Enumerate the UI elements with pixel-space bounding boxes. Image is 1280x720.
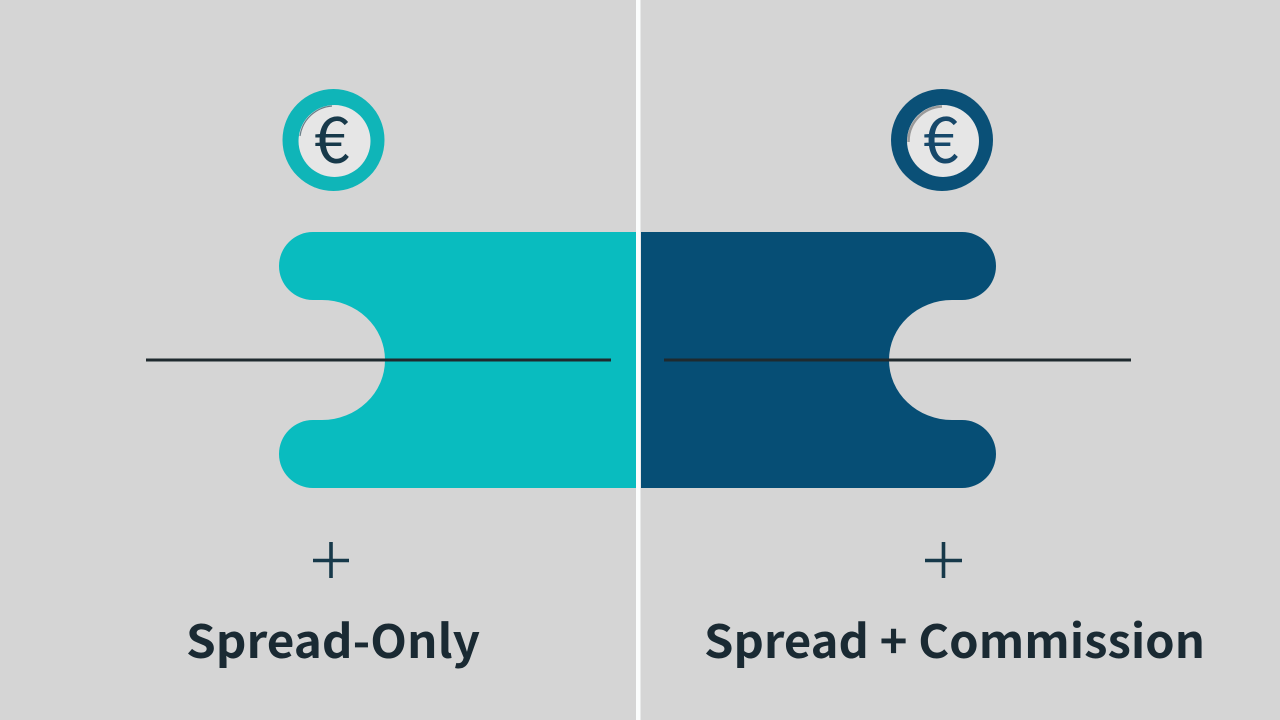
heading: spread plus commission: Spread + Commission [704,606,1205,672]
icon: navy euro coin: € [923,90,959,182]
icon: plus [925,542,962,578]
navy spread shape [641,232,996,488]
icon: plus [313,542,349,578]
icon: teal euro coin [282,89,384,191]
teal spread shape [279,232,636,488]
icon: navy euro coin [891,89,993,191]
panel: spread-only [146,89,636,672]
icon: teal euro coin: € [314,90,350,182]
heading: spread-only: Spread-Only [186,606,480,672]
spread line [664,358,1131,362]
panel: spread plus commission [641,89,1205,672]
spread line [146,358,611,362]
